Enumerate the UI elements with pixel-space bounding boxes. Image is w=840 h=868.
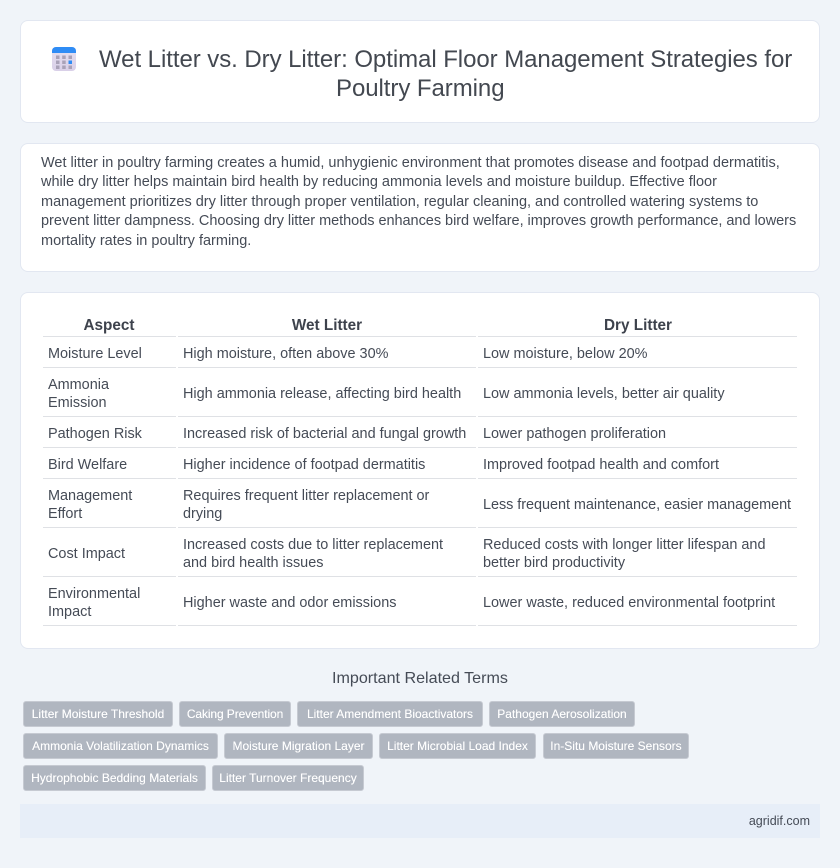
title: Poultry Farming <box>336 75 504 102</box>
row: bird welfare: Bird Welfare <box>48 457 127 473</box>
row: ammonia emission: Ammonia <box>48 377 109 393</box>
summary text <box>41 155 796 249</box>
row: moisture level: Moisture Level <box>48 346 142 362</box>
row: pathogen risk: Increased risk of bacterial and fungal growth <box>183 426 466 442</box>
row: moisture level: Low moisture, below 20% <box>483 346 648 362</box>
table header <box>83 317 672 334</box>
row: bird welfare <box>48 457 719 473</box>
tags: related terms: Litter Amendment Bioactivators <box>307 707 473 721</box>
row: environmental impact: Impact <box>48 604 91 620</box>
row: cost impact: and bird health issues <box>183 555 323 571</box>
tags: related terms: Moisture Migration Layer <box>232 739 365 753</box>
summary text: management prioritizes dry litter through proper ventilation, regular cleaning, and controlled watering systems to <box>41 194 758 210</box>
icon: calendar <box>52 47 76 71</box>
row: cost impact <box>48 537 766 571</box>
row: ammonia emission: High ammonia release, affecting bird health <box>183 386 461 402</box>
row: management effort: drying <box>183 506 222 522</box>
panel: header <box>20 20 820 123</box>
tags: related terms: Litter Turnover Frequency <box>219 771 357 785</box>
tags: related terms: Ammonia Volatilization Dynamics <box>32 739 209 753</box>
row: bird welfare: Higher incidence of footpad dermatitis <box>183 457 425 473</box>
tags: related terms: In-Situ Moisture Sensors <box>550 739 682 753</box>
summary text: while dry litter helps maintain bird health by reducing ammonia levels and moisture buildup. Effective floor <box>41 174 717 190</box>
tags: related terms: Hydrophobic Bedding Materials <box>31 771 198 785</box>
table header: Wet Litter <box>292 317 362 334</box>
footer <box>20 804 820 838</box>
row: management effort <box>48 488 791 522</box>
row: ammonia emission <box>48 377 725 411</box>
summary text: Wet litter in poultry farming creates a humid, unhygienic environment that promotes disease and footpad dermatitis, <box>41 155 780 171</box>
panel: comparison table <box>20 292 820 649</box>
row: moisture level: High moisture, often above 30% <box>183 346 388 362</box>
row: management effort: Requires frequent litter replacement or <box>183 488 429 504</box>
row: pathogen risk: Lower pathogen proliferation <box>483 426 666 442</box>
row: management effort: Management <box>48 488 132 504</box>
row: pathogen risk <box>48 426 666 442</box>
row: environmental impact: Lower waste, reduced environmental footprint <box>483 595 775 611</box>
tags: related terms: Pathogen Aerosolization <box>497 707 627 721</box>
row: management effort: Less frequent maintenance, easier management <box>483 497 791 513</box>
tags: related terms: Litter Moisture Threshold <box>32 707 164 721</box>
tags: related terms <box>23 701 689 791</box>
row: cost impact: Reduced costs with longer litter lifespan and <box>483 537 766 553</box>
row: bird welfare: Improved footpad health and comfort <box>483 457 719 473</box>
row: ammonia emission: Emission <box>48 395 107 411</box>
table header: Dry Litter <box>604 317 672 334</box>
row: environmental impact: Higher waste and odor emissions <box>183 595 396 611</box>
row: moisture level <box>48 346 648 362</box>
row: cost impact: better bird productivity <box>483 555 625 571</box>
title: Wet Litter vs. Dry Litter: Optimal Floor Management Strategies for <box>99 46 792 73</box>
row: ammonia emission: Low ammonia levels, better air quality <box>483 386 725 402</box>
title <box>99 46 792 102</box>
row: environmental impact: Environmental <box>48 586 140 602</box>
panel: summary <box>20 143 820 272</box>
comparison table <box>43 317 797 626</box>
summary text: prevent litter dampness. Choosing dry litter methods enhances bird welfare, improves growth performance, and lowers <box>41 213 796 229</box>
row: management effort: Effort <box>48 506 82 522</box>
summary text: mortality rates in poultry farming. <box>41 233 251 249</box>
row: cost impact: Cost Impact <box>48 546 125 562</box>
row: pathogen risk: Pathogen Risk <box>48 426 142 442</box>
tags: related terms: Litter Microbial Load Index <box>387 739 528 753</box>
row: cost impact: Increased costs due to litter replacement <box>183 537 443 553</box>
footer credit: agridif.com <box>749 814 810 828</box>
tags: related terms: Caking Prevention <box>187 707 283 721</box>
heading: important related terms: Important Related Terms <box>332 669 508 687</box>
table header: Aspect <box>83 317 134 334</box>
row: environmental impact <box>48 586 776 620</box>
